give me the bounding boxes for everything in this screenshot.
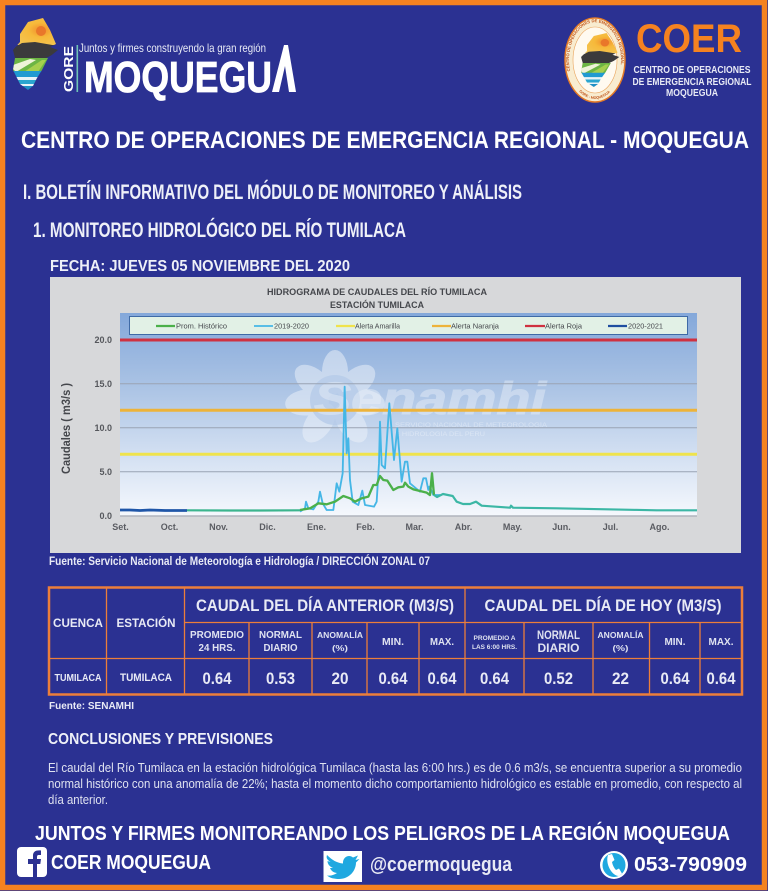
y axis labels: 5.0 xyxy=(99,467,112,477)
table row: values: 0.53 xyxy=(266,669,295,688)
alert line: orange xyxy=(120,409,697,412)
x axis labels: Dic. xyxy=(259,522,276,532)
y axis title: Caudales ( m3/s ) xyxy=(59,383,73,474)
conclusions heading: CONCLUSIONES Y PREVISIONES xyxy=(48,731,273,748)
y axis labels: 20.0 xyxy=(94,335,112,345)
table subheaders: DIARIO xyxy=(264,642,298,654)
table row: values: 0.52 xyxy=(544,669,573,688)
plot background xyxy=(120,313,697,516)
table row: values: 0.64 xyxy=(428,669,457,688)
legend: 2019-2020 xyxy=(274,322,309,330)
watermark: Senamhi: E HIDROLOGÍA DEL PERÚ xyxy=(395,431,485,438)
table row: values: 0.64 xyxy=(202,669,232,688)
table subheaders: PROMEDIO xyxy=(190,629,244,641)
legend xyxy=(130,316,688,334)
subsection heading: 1. MONITOREO HIDROLÓGICO DEL RÍO TUMILACA xyxy=(33,218,406,242)
watermark: Senamhi xyxy=(284,350,548,448)
table subheaders: PROMEDIO A xyxy=(474,635,516,642)
panel: hydrograph chart xyxy=(50,277,741,553)
logo: COER xyxy=(564,17,752,103)
chart title: ESTACIÓN TUMILACA xyxy=(330,299,424,311)
table subheaders: MIN. xyxy=(664,636,686,648)
table subheaders xyxy=(190,628,734,655)
chart source: Fuente: Servicio Nacional de Meteorología e Hidrología / DIRECCIÓN ZONAL 07 xyxy=(49,555,430,568)
COER subtitle: CENTRO DE OPERACIONES xyxy=(634,65,751,76)
legend: Alerta Roja xyxy=(545,322,583,330)
MOQUEGUA wordmark: MOQUEGU xyxy=(84,53,272,102)
alert line: yellow xyxy=(120,453,697,456)
x axis labels xyxy=(112,522,670,532)
grid lines xyxy=(120,384,697,516)
table subheaders: MAX. xyxy=(430,636,454,648)
conclusions text: día anterior. xyxy=(48,793,108,807)
series: Prom. Histórico xyxy=(187,473,697,510)
table row: values: 0.64 xyxy=(378,669,408,688)
x axis labels: Jun. xyxy=(552,522,571,532)
table row: values: 0.64 xyxy=(660,669,690,688)
legend: Prom. Histórico xyxy=(176,322,227,330)
table header: station columns xyxy=(53,615,176,630)
COER subtitle: MOQUEGUA xyxy=(666,88,718,99)
y axis labels xyxy=(94,335,112,521)
table subheaders: DIARIO xyxy=(538,641,580,655)
y axis labels: 15.0 xyxy=(94,379,112,389)
x axis labels: Nov. xyxy=(209,522,228,532)
table subheaders: (%) xyxy=(612,643,629,653)
table subheaders: MAX. xyxy=(708,636,734,648)
table subheaders: LAS 6:00 HRS. xyxy=(472,644,517,651)
footer: phone xyxy=(600,851,747,879)
table row: values: 0.64 xyxy=(480,669,509,688)
table subheaders: (%) xyxy=(332,643,348,653)
x axis labels: Mar. xyxy=(405,522,424,532)
table row: values: 20 xyxy=(332,669,348,688)
alert line: red xyxy=(120,338,697,342)
x axis labels: Set. xyxy=(112,522,129,532)
COER subtitle: DE EMERGENCIA REGIONAL xyxy=(632,77,752,88)
table subheaders: ANOMALÍA xyxy=(598,630,644,640)
chart title: HIDROGRAMA DE CAUDALES DEL RÍO TUMILACA xyxy=(267,287,487,298)
table row: values xyxy=(202,669,736,688)
table subheaders: 24 HRS. xyxy=(198,642,236,654)
table row: station names: TUMILACA xyxy=(120,672,172,684)
data table xyxy=(49,587,742,694)
table row: station names xyxy=(54,672,172,684)
table grid xyxy=(49,587,742,694)
table source: Fuente: SENAMHI xyxy=(49,700,134,712)
footer: Facebook: COER MOQUEGUA xyxy=(51,852,211,874)
x axis labels: Ago. xyxy=(650,522,670,532)
footer: Twitter: @coermoquegua xyxy=(370,854,513,876)
conclusions text xyxy=(48,761,742,807)
legend: Alerta Amarilla xyxy=(355,322,401,330)
series: 2020-2021 xyxy=(120,509,187,512)
x axis labels: Ene. xyxy=(307,522,326,532)
table header: flow groups xyxy=(196,596,722,615)
watermark: Senamhi: SERVICIO NACIONAL DE METEOROLOGÍA xyxy=(395,422,547,429)
table subheaders: MIN. xyxy=(382,636,404,648)
table row: values: 22 xyxy=(612,669,629,688)
table subheaders: ANOMALÍA xyxy=(317,630,363,640)
x axis labels: Feb. xyxy=(356,522,375,532)
table subheaders: NORMAL xyxy=(259,629,303,641)
table header: flow groups: CAUDAL DEL DÍA DE HOY (M3/S) xyxy=(484,596,722,615)
table subheaders: NORMAL xyxy=(537,628,580,642)
table row: values: 0.64 xyxy=(706,669,736,688)
icon: phone xyxy=(600,851,628,879)
x axis labels: Oct. xyxy=(161,522,178,532)
COER title: COER xyxy=(636,17,742,61)
x axis labels: Jul. xyxy=(603,522,618,532)
section heading: I. BOLETÍN INFORMATIVO DEL MÓDULO DE MONITOREO Y ANÁLISIS xyxy=(23,180,522,204)
GORE vertical label: GORE xyxy=(62,46,76,92)
icon: Twitter xyxy=(324,851,362,882)
logo: GORE Moquegua xyxy=(10,15,296,102)
footer: Facebook xyxy=(17,847,211,877)
icon: COER seal: GORE - MOQUEGUA xyxy=(580,90,610,100)
icon: COER seal: CENTRO DE OPERACIONES DE EMERGENCIA REGIONAL xyxy=(566,19,624,72)
date: FECHA: JUEVES 05 NOVIEMBRE DEL 2020 xyxy=(50,258,350,275)
footer: Twitter xyxy=(324,851,513,882)
x axis labels: Abr. xyxy=(455,522,472,532)
legend: Alerta Naranja xyxy=(451,322,500,330)
series: 2019-2020 xyxy=(300,387,440,512)
table header: flow groups: CAUDAL DEL DÍA ANTERIOR (M3/S) xyxy=(196,596,454,615)
icon: Facebook xyxy=(17,847,47,877)
y axis labels: 0.0 xyxy=(99,511,112,521)
footer: phone: 053-790909 xyxy=(634,854,747,876)
table header: station columns: ESTACIÓN xyxy=(116,615,176,630)
legend: 2020-2021 xyxy=(628,322,663,330)
tagline: Juntos y firmes construyendo la gran región xyxy=(79,41,266,55)
y axis labels: 10.0 xyxy=(94,423,112,433)
COER subtitle xyxy=(632,65,752,99)
table row: station names: TUMILACA xyxy=(54,673,102,684)
watermark: Senamhi: Senamhi xyxy=(314,373,548,424)
x axis labels: May. xyxy=(503,522,522,532)
table header: station columns: CUENCA xyxy=(53,616,103,630)
chart title xyxy=(267,287,487,311)
icon: Moquegua region map xyxy=(10,15,60,92)
icon: COER seal xyxy=(564,17,626,103)
